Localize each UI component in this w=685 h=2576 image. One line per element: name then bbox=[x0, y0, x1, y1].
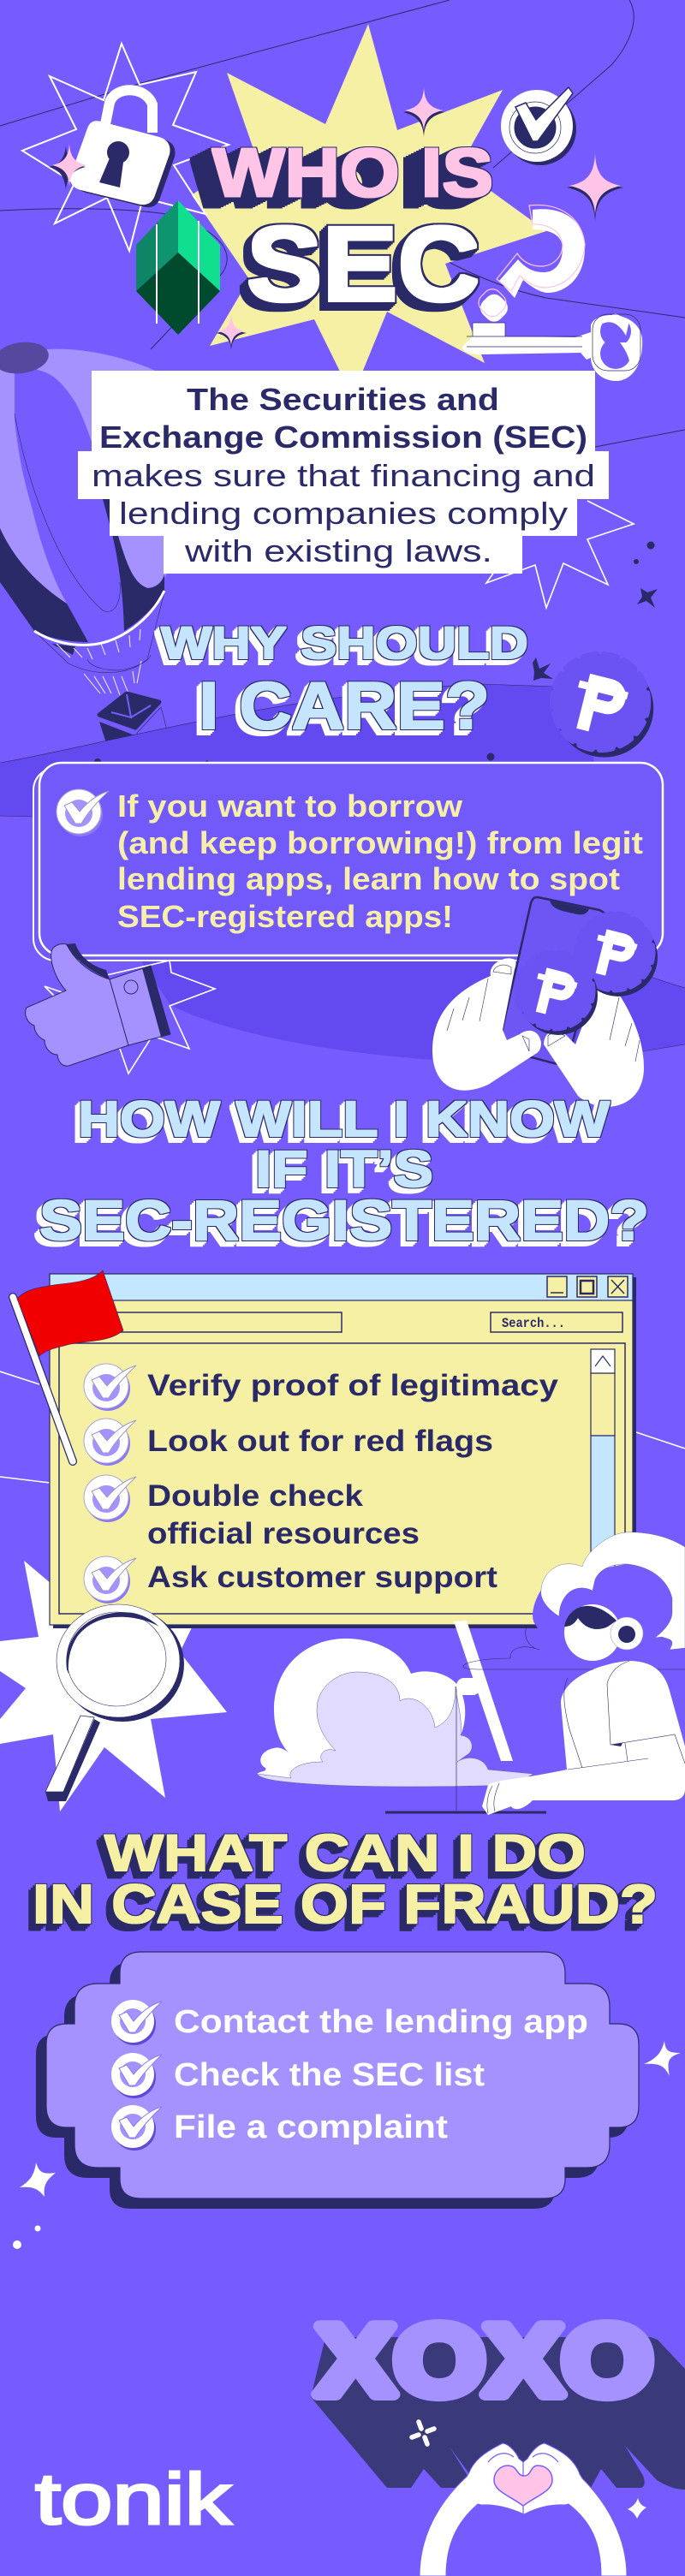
intro text block: lending companies comply bbox=[119, 496, 568, 531]
why care text: If you want to borrow bbox=[117, 788, 463, 824]
address bar bbox=[86, 1312, 342, 1332]
check list text: Double check bbox=[147, 1479, 364, 1513]
dark purple backdrop shape bbox=[0, 684, 685, 1060]
heading: what can I do: WHAT CAN I DO bbox=[104, 1824, 586, 1882]
heading: what can I do bbox=[33, 1824, 658, 1935]
why care text: SEC-registered apps! bbox=[117, 899, 453, 934]
check list text: official resources bbox=[147, 1517, 420, 1550]
white dots bbox=[13, 2226, 41, 2249]
check list icons bbox=[84, 1364, 136, 1603]
content frame bbox=[59, 1343, 625, 1614]
sparkle: pink star bottom of burst bbox=[216, 314, 247, 350]
dots and small star bbox=[634, 541, 658, 608]
icon: right hand bbox=[544, 987, 644, 1107]
fraud step text: File a complaint bbox=[174, 2109, 448, 2145]
illustration: stand line bbox=[385, 1621, 546, 1812]
sparkle: white star right bbox=[644, 2041, 681, 2076]
icon: peso coin lower bbox=[516, 952, 598, 1035]
intro text block bbox=[78, 371, 609, 574]
fraud step text: Check the SEC list bbox=[174, 2057, 485, 2093]
why care text: lending apps, learn how to spot bbox=[117, 861, 620, 896]
outline star: around lock bbox=[22, 44, 229, 251]
heading: why should I care: WHY SHOULD bbox=[161, 618, 528, 669]
panel: fraud steps bbox=[36, 1952, 639, 2209]
XOXO lettering: XOXO bbox=[317, 2305, 652, 2416]
sparkle: white star left bbox=[20, 2163, 56, 2197]
window buttons bbox=[547, 1276, 628, 1297]
intro text block: with existing laws. bbox=[184, 533, 492, 568]
logo: tonik: tonik bbox=[35, 2459, 232, 2539]
search box: Search... bbox=[502, 1316, 565, 1331]
title: SEC: SEC bbox=[247, 205, 480, 324]
small cloud outline behind person bbox=[463, 1627, 685, 1669]
small navy star by coin bbox=[533, 657, 553, 681]
sparkle: pink star right bbox=[567, 153, 623, 222]
hot-air balloon basket bbox=[99, 693, 167, 754]
fraud step icons bbox=[111, 2000, 162, 2151]
illustration: heart hands bbox=[420, 2443, 627, 2576]
outline star: behind thumb bbox=[45, 961, 215, 1074]
outline star: right of intro bbox=[486, 501, 634, 608]
check list text bbox=[147, 1369, 559, 1594]
illustration: cloud bbox=[257, 1639, 533, 1787]
heading: how will I know: IF IT’S bbox=[255, 1140, 433, 1198]
check list text: Ask customer support bbox=[147, 1561, 497, 1594]
scrollbar bbox=[591, 1349, 615, 1614]
decorative white lines bbox=[0, 1371, 685, 1483]
sparkle: four-bar bbox=[412, 2422, 434, 2444]
icon: peso coin upper bbox=[576, 913, 658, 996]
icon: red flag bbox=[13, 1270, 123, 1461]
icon: magnifying glass bbox=[45, 1604, 184, 1801]
white starburst behind magnifier bbox=[0, 1561, 227, 1812]
sparkle: pink star left bbox=[49, 144, 86, 190]
title: WHO IS: WHO IS bbox=[212, 134, 493, 211]
icon: phone bbox=[501, 897, 607, 1063]
fraud step text: Contact the lending app bbox=[174, 2004, 588, 2040]
icon: question mark bbox=[474, 205, 585, 325]
check list text: Look out for red flags bbox=[147, 1425, 493, 1458]
xoxo long shadow bbox=[311, 2337, 685, 2490]
heading: how will I know: SEC-REGISTERED? bbox=[39, 1188, 649, 1252]
illustration: person with headphones bbox=[482, 1532, 685, 1815]
backdrop outlines bbox=[0, 684, 685, 1051]
hot-air balloon bbox=[0, 339, 167, 695]
icon: key bbox=[462, 313, 642, 381]
intro text block: makes sure that financing and bbox=[92, 458, 595, 493]
icon: check bbox=[57, 789, 109, 836]
heading: what can I do: IN CASE OF FRAUD? bbox=[33, 1873, 658, 1935]
icon: left hand bbox=[432, 958, 541, 1091]
why care text bbox=[117, 788, 643, 934]
intro text block: Exchange Commission (SEC) bbox=[99, 419, 587, 455]
starburst: yellow title burst bbox=[192, 24, 546, 377]
icon: check badge bbox=[501, 87, 576, 165]
icon: padlock bbox=[70, 90, 175, 207]
small dots on backdrop bbox=[94, 753, 495, 765]
logo: green emblem bbox=[136, 200, 220, 335]
heading: why should I care bbox=[161, 618, 528, 743]
intro text block: The Securities and bbox=[187, 382, 499, 417]
search box bbox=[491, 1312, 622, 1332]
sparkle: white diamond bbox=[628, 2498, 646, 2519]
icon: peso coin bbox=[552, 654, 653, 758]
why care text: (and keep borrowing!) from legit bbox=[117, 825, 643, 860]
icon: thumbs up bbox=[26, 943, 170, 1066]
heading: how will I know: HOW WILL I KNOW bbox=[78, 1092, 610, 1147]
heading: why should I care: I CARE? bbox=[199, 668, 490, 743]
panel: why care bbox=[33, 763, 663, 961]
background curved lines bbox=[0, 0, 685, 447]
panel: browser window bbox=[50, 1274, 636, 1628]
check list text: Verify proof of legitimacy bbox=[147, 1369, 559, 1402]
fraud step text bbox=[174, 2004, 588, 2145]
heading: how will I know bbox=[39, 1092, 649, 1252]
sparkle: pink star top centre bbox=[403, 87, 444, 137]
